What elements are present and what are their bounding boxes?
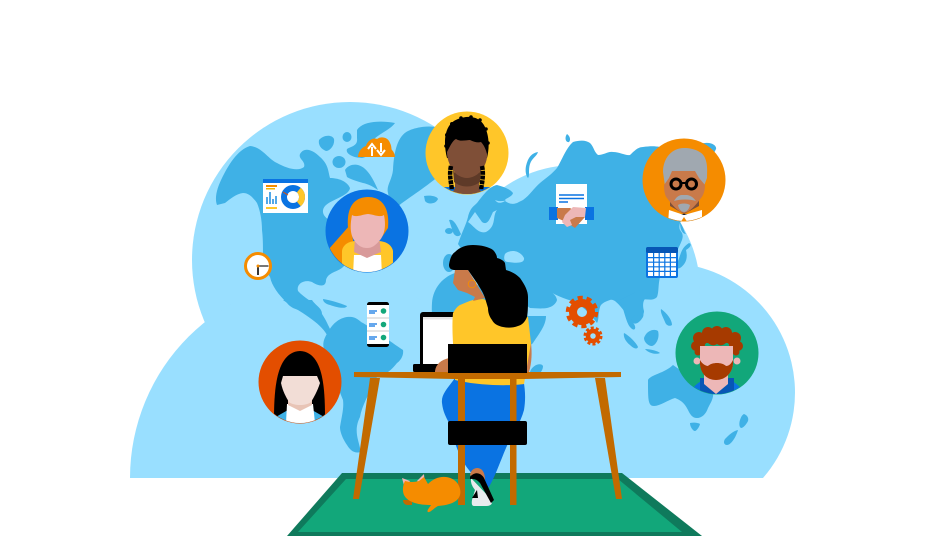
continent: Eurasia <box>458 141 716 324</box>
continent: South-East Asia <box>620 286 658 330</box>
icon: gears <box>568 298 601 344</box>
woman at desk <box>413 245 532 506</box>
continent: Baffin island <box>345 165 378 190</box>
torso <box>452 299 531 385</box>
cat <box>402 474 460 512</box>
world map continents <box>216 122 748 453</box>
hair <box>449 245 528 328</box>
continent: Africa <box>432 272 546 351</box>
icon: clock <box>246 254 270 278</box>
continent: Greenland <box>388 127 440 207</box>
shoe <box>470 468 494 506</box>
portrait: woman with braids <box>426 112 508 197</box>
continent: South America <box>323 317 403 453</box>
jeans <box>442 378 525 490</box>
icon: phone checklist <box>367 302 389 347</box>
left hand <box>435 358 449 373</box>
background globe blob <box>130 102 795 478</box>
continent: Australia <box>648 365 713 418</box>
icon: calendar <box>646 247 678 278</box>
desk <box>353 372 622 499</box>
continent: inland seas <box>468 210 497 232</box>
chair <box>448 344 527 505</box>
icon: cloud sync <box>358 137 395 157</box>
continent: Japan and islands <box>676 243 691 269</box>
icon: dashboard <box>263 179 308 213</box>
icon: handshake document <box>549 184 594 228</box>
continent: Arctic island <box>347 122 395 158</box>
portrait: woman with orange hair <box>320 190 408 275</box>
portrait: older man with glasses <box>642 138 726 226</box>
portrait: woman with black fringe <box>258 340 342 426</box>
neck and face <box>453 270 485 301</box>
continent: Central America <box>283 300 331 335</box>
portrait: man with red beard <box>676 312 758 396</box>
rug <box>287 473 702 536</box>
laptop <box>413 312 460 372</box>
earring <box>468 280 476 288</box>
illustration: remote worker with global team <box>130 102 795 536</box>
right arm <box>522 343 532 372</box>
continent: North America <box>216 146 360 312</box>
